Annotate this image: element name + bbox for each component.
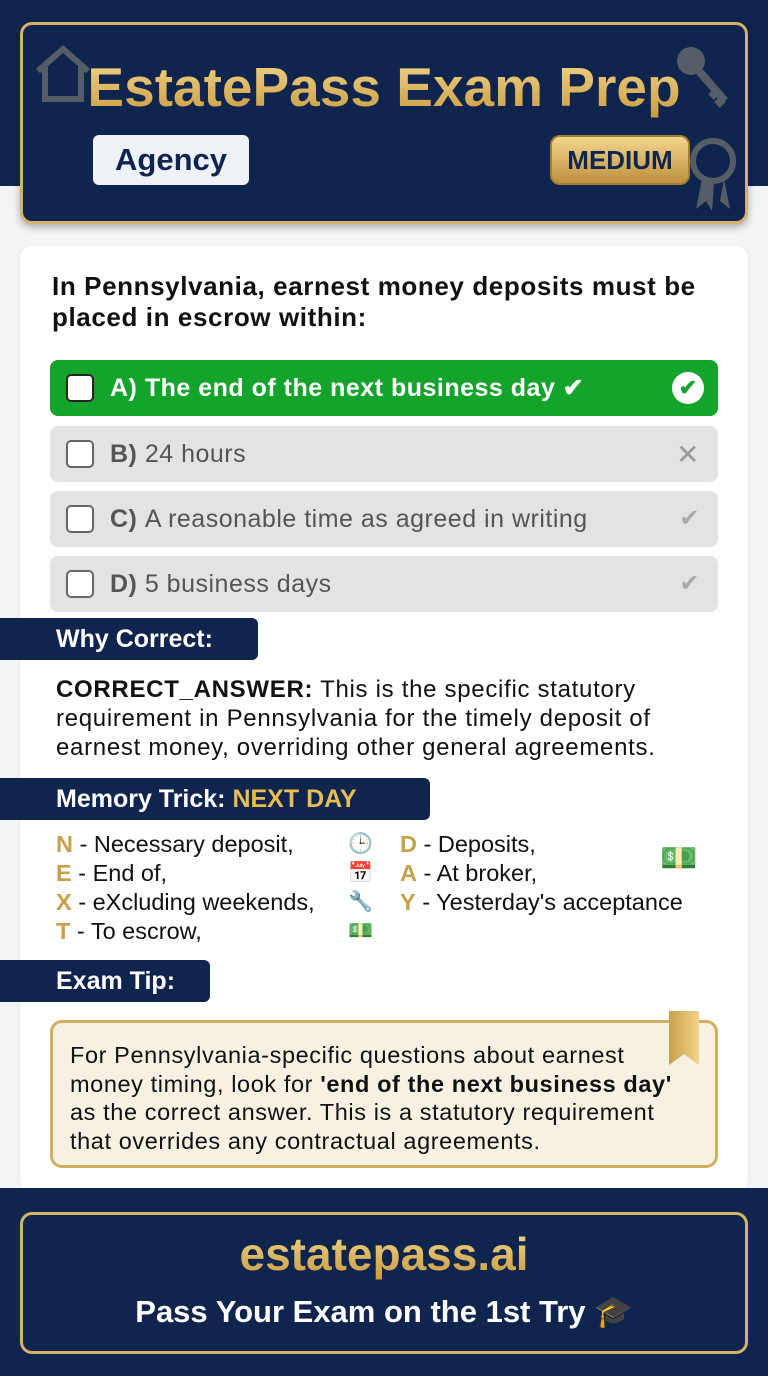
mnemonic list: 🔧 [348,891,373,913]
tag: Agency: Agency [115,142,227,177]
text: explanation: earnest money, overriding other general agreements. [56,734,656,761]
mnemonic list: N - Necessary deposit, [56,831,294,857]
icon: ribbon [690,138,736,211]
option D [50,556,718,612]
footer panel [20,1212,748,1354]
question: In Pennsylvania, earnest money deposits must be [52,271,696,301]
footer url: estatepass.ai [240,1228,528,1280]
heading: Memory Trick [0,778,430,820]
tip box: For Pennsylvania-specific questions about earnest [70,1042,625,1068]
option A correct: A) The end of the next business day ✔ [110,374,584,402]
question: placed in escrow within: [52,302,367,332]
text: explanation [56,676,656,761]
mnemonic list: X - eXcluding weekends, [56,889,315,915]
mnemonic list: T - To escrow, [56,918,202,944]
badge: MEDIUM: MEDIUM [567,145,673,175]
mnemonic list: A - At broker, [400,860,537,886]
question [52,271,696,332]
mnemonic list: 💵 [660,842,697,875]
option C: C) [110,504,137,532]
text: explanation: requirement in Pennsylvania for the timely deposit of [56,705,651,732]
mnemonic list: Y - Yesterday's acceptance [400,889,683,915]
icon: bookmark ribbon [669,1011,699,1065]
option C [50,491,718,547]
icon: house [36,45,90,102]
tip box [50,1020,718,1168]
option D: D) [110,570,137,598]
option D: 5 business days [145,570,332,598]
mnemonic list: D - Deposits, [400,831,536,857]
main card [20,246,748,1192]
heading: Memory Trick: Memory Trick: NEXT DAY [56,785,357,813]
heading: Exam Tip [0,960,210,1002]
footer url [23,1227,745,1281]
option A correct [50,360,718,416]
text: explanation: CORRECT_ANSWER: This is the specific statutory [56,676,636,703]
option C: A reasonable time as agreed in writing [145,504,588,532]
mnemonic list: 📅 [348,862,373,884]
option B: ✕ [676,439,700,470]
tip box: that overrides any contractual agreements. [70,1128,541,1154]
mnemonic list: 💵 [348,920,373,942]
heading: Why Correct: Why Correct: [56,625,213,653]
option A correct: ✔ [679,375,697,400]
mnemonic list [56,831,697,944]
footer slogan: Pass Your Exam on the 1st Try 🎓 [135,1294,633,1329]
tip box: as the correct answer. This is a statutory requirement [70,1099,654,1125]
header panel [20,22,748,224]
tag: Agency [93,135,249,185]
mnemonic list: E - End of, [56,860,167,886]
option C: ✔ [679,505,700,532]
option B [50,426,718,482]
footer band [0,1188,768,1376]
top navy band [0,0,768,186]
icon: key [677,47,728,108]
option B: B) [110,440,137,468]
heading: Why Correct [0,618,258,660]
option B: 24 hours [145,440,246,468]
heading: Exam Tip: Exam Tip: [56,967,175,995]
option D: ✔ [679,570,700,597]
badge: MEDIUM [550,135,690,185]
title: EstatePass Exam Prep [87,56,681,118]
tip box: money timing, look for 'end of the next business day' [70,1070,672,1096]
mnemonic list: 🕒 [348,833,373,855]
